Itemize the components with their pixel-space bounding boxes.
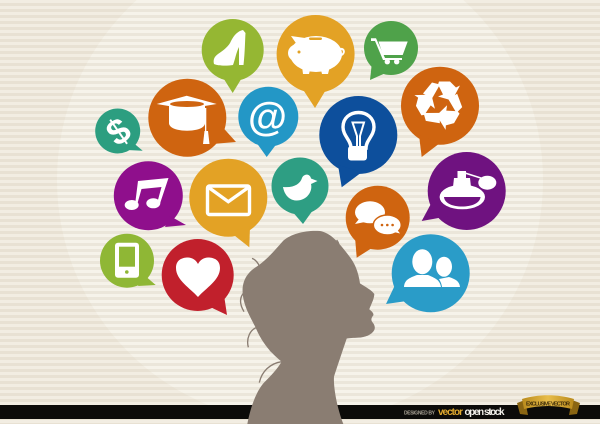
bubble: people	[386, 234, 470, 312]
icon: recycle	[411, 82, 468, 132]
bubble: music	[114, 161, 186, 230]
credit text: DESIGNED BY	[404, 410, 436, 416]
bubble: dollar	[95, 108, 143, 154]
icon: graduation cap	[157, 96, 217, 144]
bubble: envelope	[189, 159, 267, 247]
credit text: open stock	[464, 407, 505, 418]
woman silhouette	[241, 231, 375, 424]
bubble: light bulb	[319, 96, 397, 187]
icon: two people	[404, 249, 460, 287]
bubble: at sign	[238, 87, 298, 157]
icon: speech balloons	[355, 201, 401, 235]
icon: perfume bottle	[440, 171, 496, 209]
icon: mobile phone	[115, 243, 139, 278]
credit text: vector	[438, 407, 463, 418]
icon: at sign: @	[248, 95, 287, 139]
icon: heart	[176, 258, 220, 297]
bubble: chat	[346, 186, 410, 258]
icon: shopping cart	[371, 38, 408, 64]
credit text	[404, 407, 505, 418]
bubble: shoe	[202, 19, 264, 93]
icon: envelope	[208, 186, 250, 214]
bubble: recycle	[401, 67, 479, 157]
bubble: perfume	[422, 152, 506, 230]
icon: high heel	[214, 30, 246, 66]
bubble: bird	[272, 158, 328, 224]
icon: bird	[283, 175, 318, 201]
icon: dollar sign: $	[98, 109, 138, 154]
icon: light bulb	[343, 112, 374, 160]
bubble: cart	[364, 21, 418, 80]
icon: piggy bank	[288, 36, 344, 74]
footer bar	[0, 405, 600, 419]
bubble: graduation	[148, 79, 236, 157]
exclusive vector badge: EXCLUSIVE VECTOR	[526, 402, 570, 408]
exclusive vector badge	[517, 395, 580, 415]
bubble: piggy bank	[277, 15, 355, 108]
bubble: heart	[162, 239, 234, 315]
icon: music notes	[125, 178, 168, 210]
bubble: phone	[100, 234, 156, 288]
